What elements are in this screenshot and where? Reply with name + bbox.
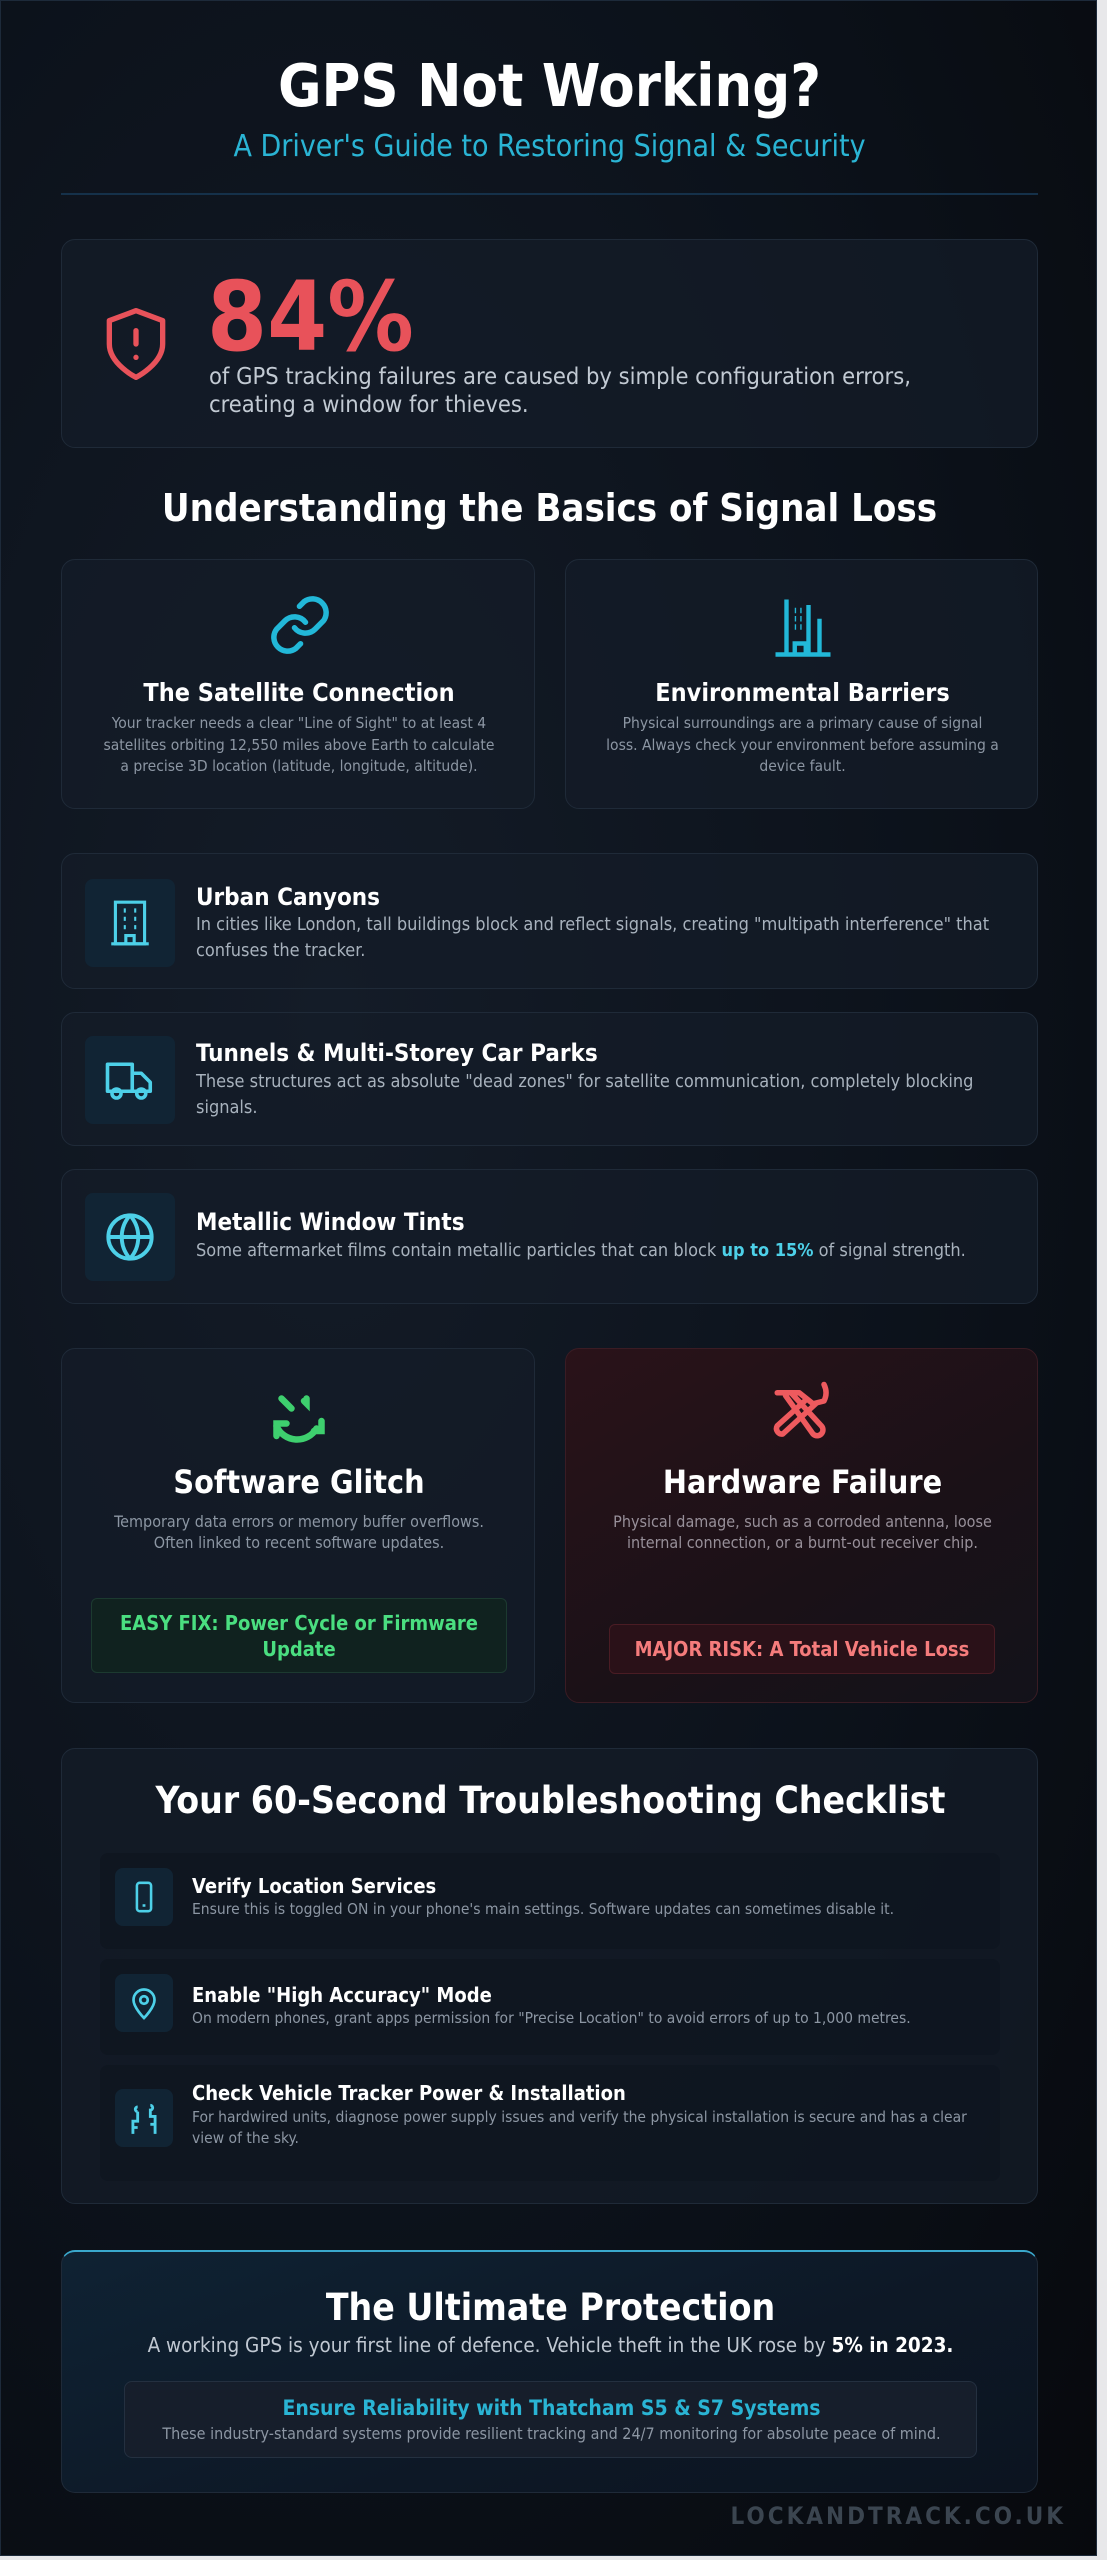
title: Check Vehicle Tracker Power & Installation <box>192 2081 626 2105</box>
text: In cities like London, tall buildings block and reflect signals, creating "multipath interference" that confuses the tracker. <box>196 914 989 961</box>
title: Urban Canyons <box>196 883 380 911</box>
icon: globe <box>85 1193 175 1281</box>
stat number: 84% <box>207 261 414 373</box>
callout: easy fix <box>91 1598 507 1673</box>
title: Metallic Window Tints <box>196 1208 465 1236</box>
item: location services <box>100 1853 1000 1949</box>
panel: ultimate protection <box>61 2250 1038 2493</box>
icon: shield alert <box>106 308 166 380</box>
panel: hardware failure <box>565 1348 1038 1703</box>
callout: thatcham: Ensure Reliability with Thatcham S5 & S7 Systems <box>282 2396 821 2420</box>
heading: Software Glitch <box>173 1463 425 1501</box>
icon: link <box>271 596 329 654</box>
heading: Your 60-Second Troubleshooting Checklist <box>156 1779 945 1822</box>
icon: building <box>776 600 830 657</box>
heading: The Satellite Connection <box>143 678 455 707</box>
stat description: of GPS tracking failures are caused by simple configuration errors, creating a window for thieves. <box>209 362 911 418</box>
item: tracker power <box>100 2065 1000 2181</box>
footer brand: LOCKANDTRACK.CO.UK <box>730 2502 1066 2530</box>
text: Physical surroundings are a primary cause of signal loss. Always check your environment before assuming a device fault. <box>606 714 999 775</box>
title: Tunnels & Multi-Storey Car Parks <box>196 1039 598 1067</box>
subtitle: A Driver's Guide to Restoring Signal & Security <box>233 129 866 164</box>
text: For hardwired units, diagnose power supply issues and verify the physical installation is secure and has a clear view of the sky. <box>192 2108 967 2147</box>
title: Verify Location Services <box>192 1874 436 1898</box>
row: window tints <box>61 1169 1038 1304</box>
text: Physical damage, such as a corroded antenna, loose internal connection, or a burnt-out receiver chip. <box>613 1512 992 1552</box>
text: Ensure this is toggled ON in your phone's main settings. Software updates can sometimes disable it. <box>192 1900 894 1918</box>
heading: The Ultimate Protection <box>326 2286 775 2329</box>
callout: thatcham: These industry-standard systems provide resilient tracking and 24/7 monitoring for absolute peace of mind. <box>162 2424 941 2443</box>
panel: 84% stat <box>61 239 1038 448</box>
icon: building <box>85 879 175 967</box>
text: These structures act as absolute "dead zones" for satellite communication, completely blocking signals. <box>196 1071 973 1118</box>
callout: major risk <box>609 1624 995 1674</box>
icon: connectors <box>115 2089 173 2147</box>
callout: easy fix: EASY FIX: Power Cycle or Firmware Update <box>120 1611 478 1661</box>
item: high accuracy <box>100 1959 1000 2055</box>
row: urban canyons <box>61 853 1038 989</box>
icon: refresh <box>273 1395 325 1443</box>
icon: tools <box>774 1382 829 1438</box>
icon: pin <box>115 1974 173 2032</box>
text: Temporary data errors or memory buffer overflows. Often linked to recent software updates. <box>114 1512 484 1552</box>
icon: truck <box>85 1036 175 1124</box>
panel: environmental barriers <box>565 559 1038 809</box>
heading: Environmental Barriers <box>655 678 950 707</box>
callout: thatcham <box>124 2381 977 2458</box>
panel: satellite connection <box>61 559 535 809</box>
title: Enable "High Accuracy" Mode <box>192 1983 492 2007</box>
heading: Hardware Failure <box>663 1463 942 1501</box>
panel: software glitch <box>61 1348 535 1703</box>
text: Your tracker needs a clear "Line of Sight" to at least 4 satellites orbiting 12,550 miles above Earth to calculate a precise 3D location (latitude, longitude, altitude). <box>104 714 494 775</box>
callout: major risk: MAJOR RISK: A Total Vehicle Loss <box>635 1637 969 1661</box>
row: tunnels <box>61 1012 1038 1146</box>
heading: basics: Understanding the Basics of Signal Loss <box>162 486 937 530</box>
text: A working GPS is your first line of defence. Vehicle theft in the UK rose by 5% in 2023. <box>148 2333 953 2357</box>
text: On modern phones, grant apps permission for "Precise Location" to avoid errors of up to 1,000 metres. <box>192 2009 911 2027</box>
title: GPS Not Working? <box>278 51 821 120</box>
icon: phone <box>115 1868 173 1926</box>
text: Some aftermarket films contain metallic particles that can block up to 15% of signal strength. <box>196 1240 966 1261</box>
panel: checklist <box>61 1748 1038 2204</box>
